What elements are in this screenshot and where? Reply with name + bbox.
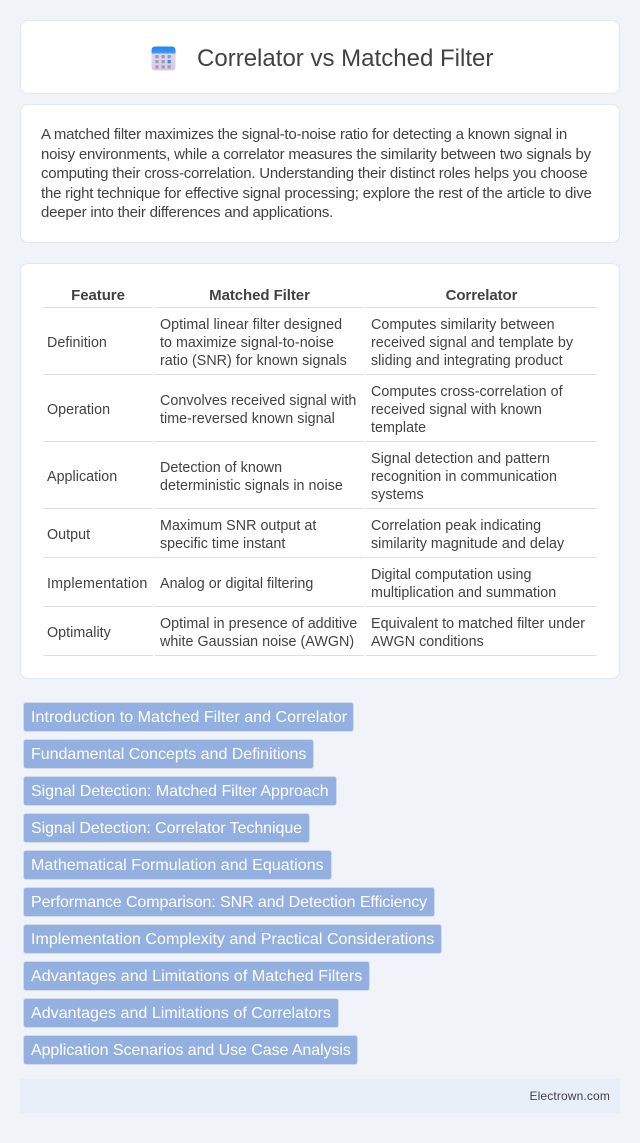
intro line 2: noisy environments, while a correlator measures the similarity between two signals by — [41, 146, 591, 162]
row: application: Detection of known — [160, 460, 282, 476]
tag 1: Introduction to Matched Filter and Correlator — [31, 709, 347, 726]
row: operation: received signal with known — [371, 402, 542, 418]
tag 6: Performance Comparison: SNR and Detection Efficiency — [31, 894, 427, 911]
intro line 3: computing their cross-correlation. Understanding their distinct roles helps you choose — [41, 165, 587, 182]
tag 7: Implementation Complexity and Practical Considerations — [31, 931, 434, 948]
row: application: Application — [47, 469, 117, 485]
row: definition: received signal and template by — [371, 335, 573, 351]
tag 9: Advantages and Limitations of Correlators — [31, 1005, 331, 1022]
tag 7 — [23, 924, 442, 954]
row: operation: time-reversed known signal — [160, 411, 335, 427]
row: optimality — [47, 616, 585, 650]
row: definition: Computes similarity between — [371, 317, 555, 333]
row: definition: to maximize signal-to-noise — [160, 335, 334, 351]
footer — [20, 1079, 620, 1113]
row: definition: ratio (SNR) for known signals — [160, 353, 347, 369]
table header: Feature — [71, 287, 125, 304]
row: optimality: AWGN conditions — [371, 634, 484, 650]
row: application — [47, 451, 557, 503]
row: optimality: Optimality — [47, 625, 111, 641]
row: optimality: white Gaussian noise (AWGN) — [160, 634, 354, 650]
tag 3 — [23, 776, 337, 806]
row: implementation: Implementation — [47, 576, 148, 592]
row: application: recognition in communication — [371, 469, 557, 485]
row: output: specific time instant — [160, 536, 285, 552]
row: operation: Operation — [47, 402, 110, 418]
tag 5 — [23, 850, 332, 880]
row: application: deterministic signals in noise — [160, 478, 343, 494]
intro line 5: deeper into their differences and applications. — [41, 204, 333, 221]
row: implementation: Analog or digital filtering — [160, 576, 313, 592]
tag 4: Signal Detection: Correlator Technique — [31, 820, 302, 837]
row: operation: Computes cross-correlation of — [371, 384, 563, 400]
title: Correlator vs Matched Filter — [197, 45, 493, 72]
row: output: Output — [47, 527, 90, 543]
row: application: systems — [371, 487, 424, 503]
footer credit: Electrown.com — [529, 1089, 610, 1103]
tag 8 — [23, 961, 370, 991]
panel: comparison table — [20, 263, 620, 679]
tag 1 — [23, 702, 354, 732]
row: optimality: Optimal in presence of additive — [160, 616, 357, 632]
table header: Matched Filter — [209, 287, 310, 304]
row: application: Signal detection and pattern — [371, 451, 550, 467]
tag 3: Signal Detection: Matched Filter Approach — [31, 783, 329, 800]
row: definition: sliding and integrating product — [371, 353, 563, 369]
row: implementation: Digital computation using — [371, 567, 532, 583]
row: implementation: multiplication and summation — [371, 585, 556, 601]
intro text panel — [20, 104, 620, 243]
row: definition: Definition — [47, 335, 107, 351]
tag 10 — [23, 1035, 358, 1065]
topic tags list — [23, 702, 442, 1065]
tag 2: Fundamental Concepts and Definitions — [31, 746, 306, 763]
intro line 1: A matched filter maximizes the signal-to-noise ratio for detecting a known signal in — [41, 126, 567, 143]
table header — [71, 287, 518, 304]
tag 9 — [23, 998, 339, 1028]
row: output: Maximum SNR output at — [160, 518, 316, 534]
tag 5: Mathematical Formulation and Equations — [31, 857, 324, 874]
row: output: Correlation peak indicating — [371, 518, 541, 534]
row: definition — [47, 317, 573, 369]
tag 10: Application Scenarios and Use Case Analysis — [31, 1042, 351, 1059]
table header: Correlator — [446, 287, 517, 304]
row: operation — [47, 384, 563, 436]
row: optimality: Equivalent to matched filter under — [371, 616, 585, 632]
header card — [20, 20, 620, 94]
tag 8: Advantages and Limitations of Matched Filters — [31, 968, 362, 985]
row: implementation — [47, 567, 556, 601]
tag 4 — [23, 813, 310, 843]
row: definition: Optimal linear filter designed — [160, 317, 342, 333]
tag 6 — [23, 887, 435, 917]
row: operation: Convolves received signal with — [160, 393, 356, 409]
row: output: similarity magnitude and delay — [371, 536, 564, 552]
intro line 4: the right technique for effective signal processing; explore the rest of the article to dive — [41, 184, 592, 202]
row: output — [47, 518, 564, 552]
tag 2 — [23, 739, 314, 769]
row: operation: template — [371, 420, 426, 436]
icon: calendar — [152, 46, 176, 70]
